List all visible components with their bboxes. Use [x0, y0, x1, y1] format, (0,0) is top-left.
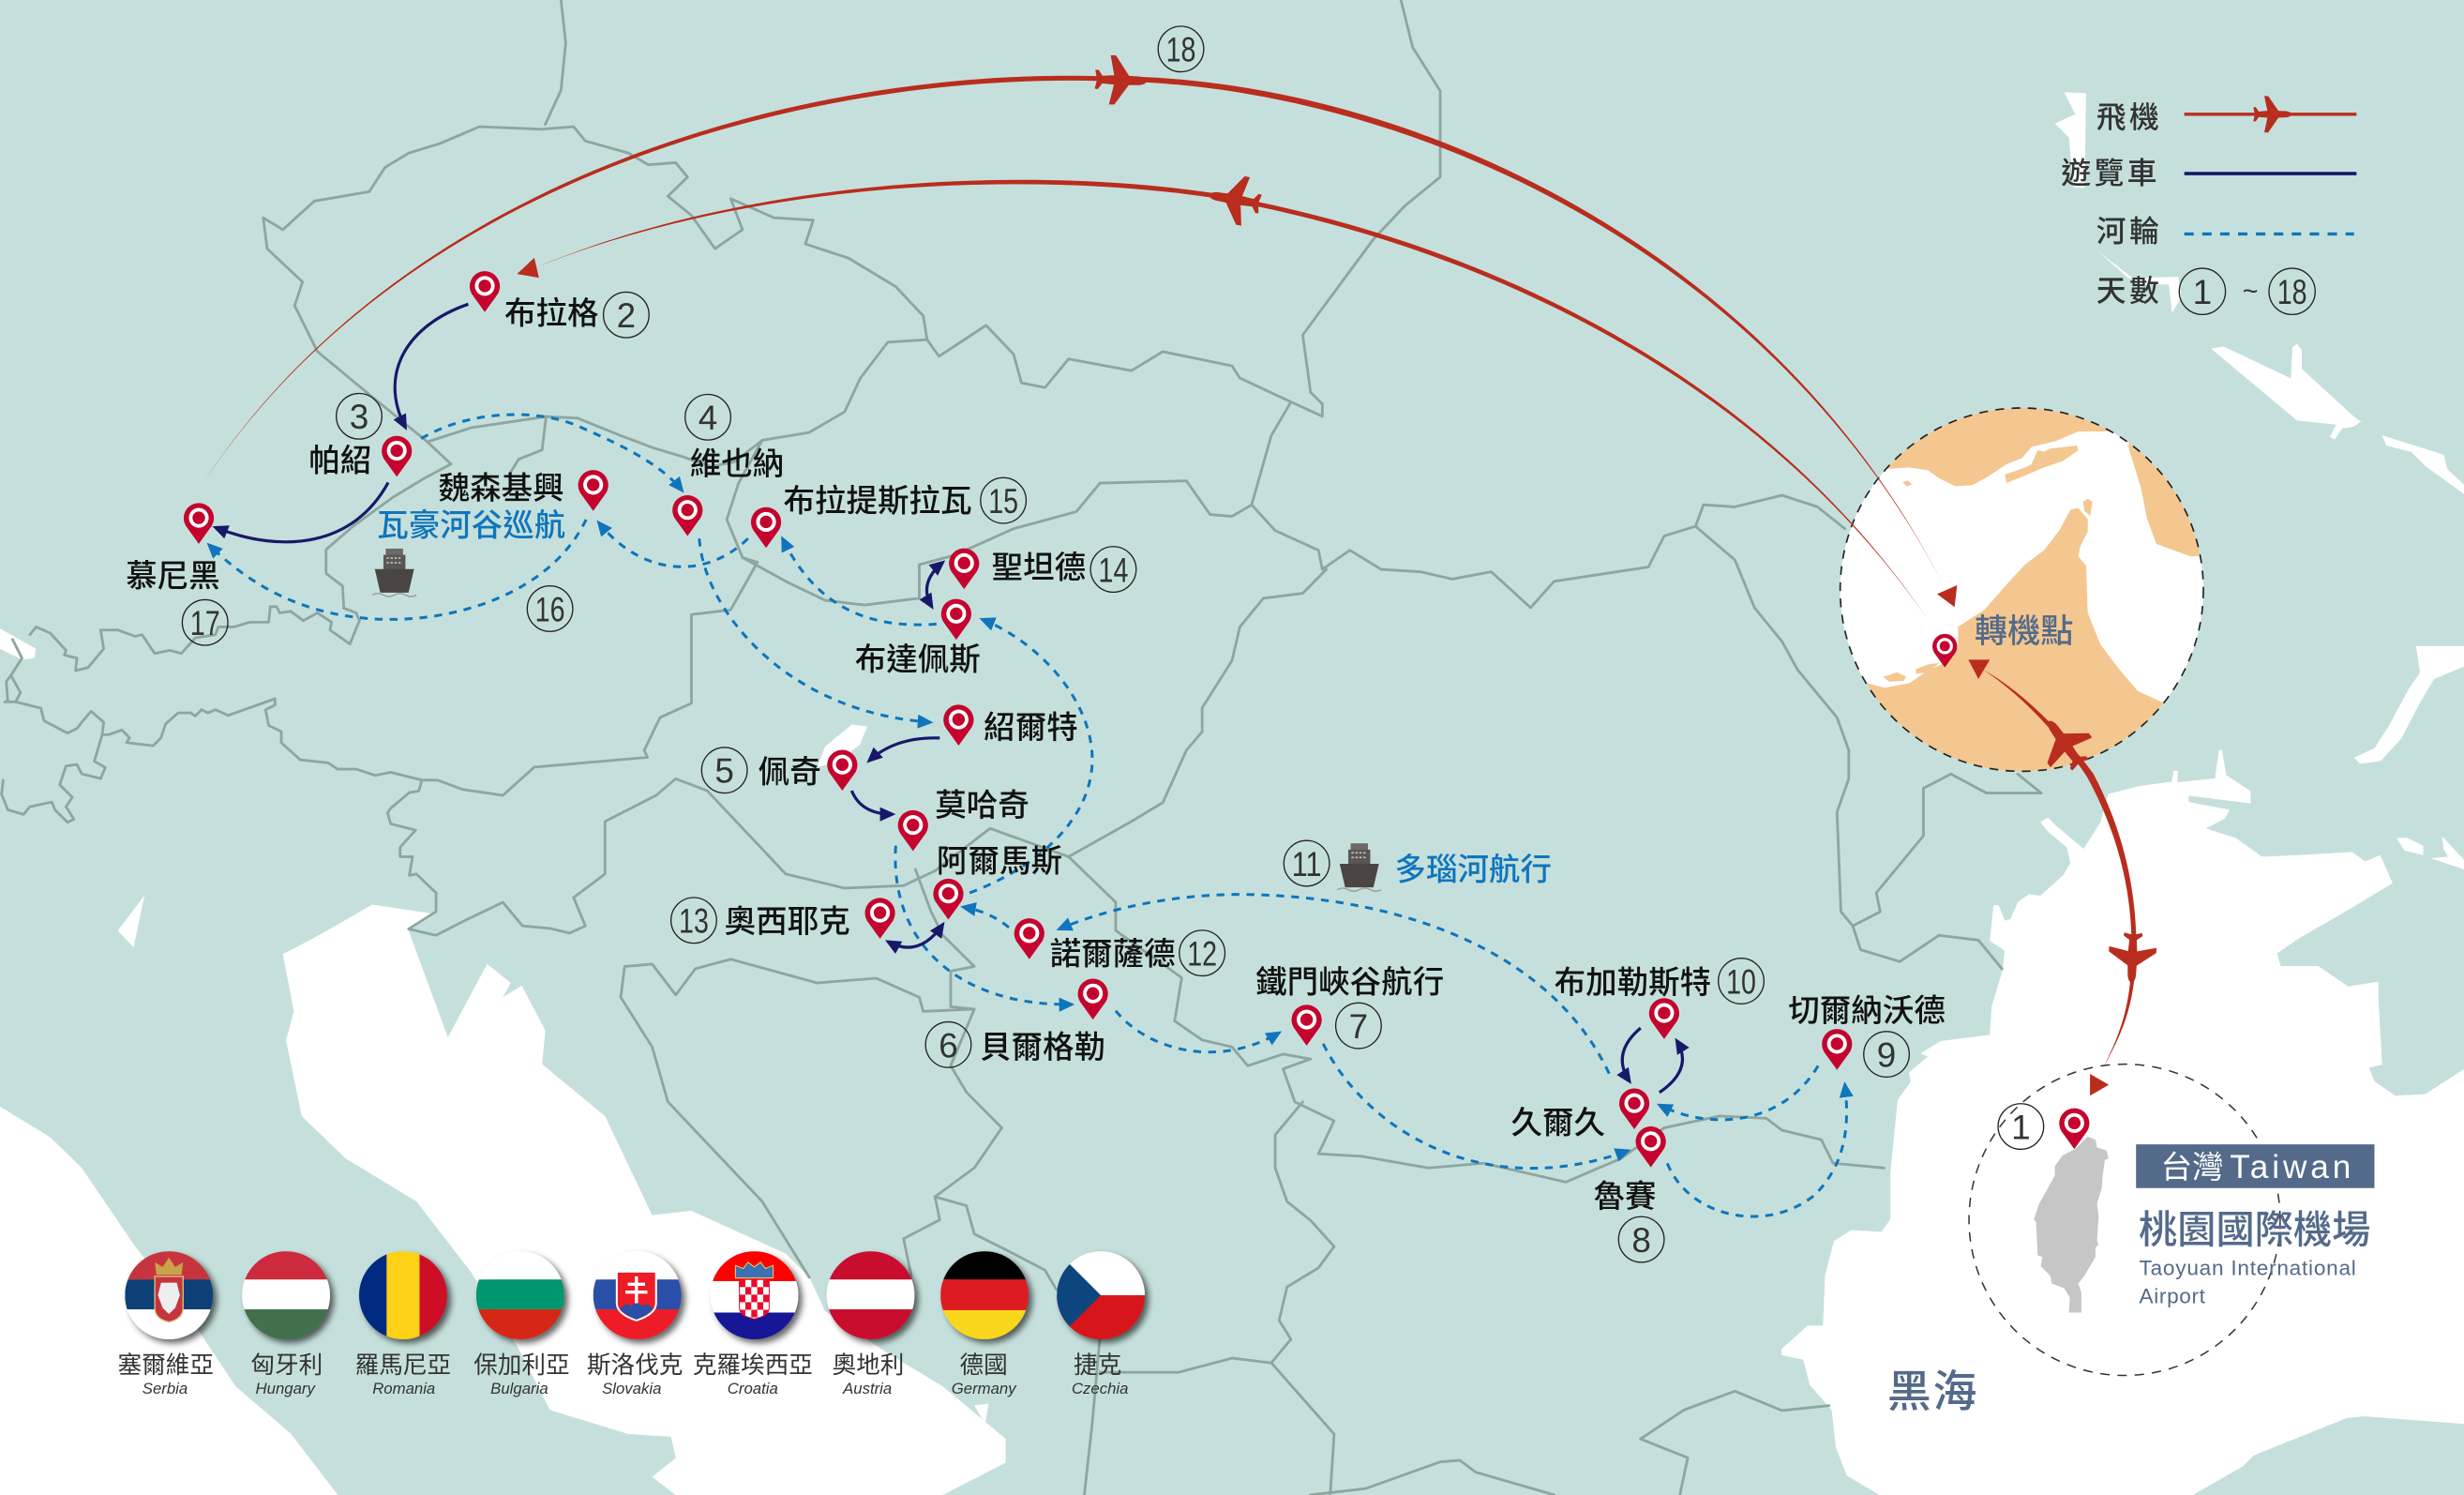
arrow: transit lower [1968, 659, 1990, 679]
day numbers: 5 [714, 752, 734, 791]
day numbers: 11 [1292, 845, 1322, 883]
Black Sea [1781, 749, 2464, 1495]
day numbers: 13 [679, 902, 709, 941]
legend: days [2096, 268, 2315, 314]
day numbers: 2 [617, 296, 636, 335]
map pins [184, 271, 2089, 1168]
flag names: Austria [842, 1380, 892, 1397]
ship icon: Wachau [372, 549, 416, 596]
transit inset circle [1840, 407, 2204, 773]
day numbers: 16 [535, 590, 565, 628]
Taiwan panel [1969, 1065, 2374, 1376]
day numbers: 18 [1166, 31, 1195, 69]
city labels: 維也納 [690, 447, 784, 482]
flight routes [201, 76, 2137, 1069]
flag names: Hungary [256, 1380, 316, 1397]
flag names: Slovakia [602, 1380, 661, 1397]
Taiwan label: 台灣 [2161, 1151, 2224, 1185]
legend: plane [2096, 96, 2356, 134]
city labels: 紹爾特 [984, 711, 1078, 746]
plane: upper arc [1094, 54, 1148, 106]
legend: plane: 飛機 [2096, 100, 2162, 134]
city labels: 帕紹 [308, 444, 371, 478]
flag names: Germany [952, 1380, 1017, 1397]
city labels: 莫哈奇 [935, 789, 1029, 823]
Lake Constance [0, 628, 36, 659]
flag: Romania [359, 1251, 448, 1339]
flag names: 奧地利 [833, 1352, 904, 1379]
day numbers: 14 [1099, 551, 1128, 589]
legend: river cruise: 河輪 [2096, 214, 2162, 248]
city labels: 佩奇 [759, 756, 821, 791]
flag names: 塞爾維亞 [118, 1352, 214, 1379]
day numbers: 12 [1187, 935, 1217, 974]
city labels: 慕尼黑 [126, 560, 220, 595]
legend: days: ~ [2243, 277, 2258, 307]
inset sea disc [1840, 408, 2203, 771]
Taiwan dashed circle [1969, 1065, 2280, 1376]
Caspian fragments [2211, 344, 2361, 439]
flag names: 羅馬尼亞 [355, 1352, 451, 1379]
day numbers: 3 [350, 398, 368, 436]
river cruise routes [209, 415, 1847, 1216]
day numbers: 4 [699, 399, 717, 437]
flag names: 德國 [960, 1352, 1008, 1379]
Lake Balaton [818, 725, 867, 767]
inset dashed outline [1840, 408, 2203, 771]
arrow: Taoyuan [2090, 1074, 2109, 1095]
legend: days: 天數 [2096, 274, 2162, 308]
flag names: 匈牙利 [250, 1352, 323, 1379]
Tyrrhenian Sea [0, 1107, 338, 1495]
day numbers: 1 [2011, 1108, 2031, 1146]
flag names: Romania [372, 1380, 435, 1397]
transit label: 轉機點 [1975, 613, 2073, 650]
Sea of Azov [2354, 646, 2464, 764]
flag names: Serbia [143, 1380, 188, 1397]
plane: southern arc [2108, 932, 2157, 984]
city labels: 鐵門峽谷航行 [1255, 965, 1444, 1000]
city labels [126, 296, 1946, 1215]
flag names: Croatia [728, 1380, 778, 1397]
ship icon: Danube [1337, 843, 1381, 891]
city labels: 布拉格 [504, 296, 599, 331]
flag names [118, 1352, 1128, 1397]
city labels: 布加勒斯特 [1555, 966, 1711, 1001]
legend: coach: 遊覽車 [2061, 157, 2160, 190]
airport english line 2: Airport [2140, 1284, 2206, 1307]
day numbers: 17 [190, 604, 220, 642]
day numbers [182, 26, 2044, 1262]
flight: Taoyuan to transit point [1983, 670, 2137, 1069]
coach routes [216, 304, 1682, 1093]
flag: Serbia [125, 1251, 213, 1339]
city labels: 布達佩斯 [855, 642, 981, 677]
city labels: 魯賽 [1593, 1180, 1657, 1215]
flight: Munich to transit point [201, 76, 1943, 584]
flag: Croatia [711, 1251, 798, 1339]
city labels: 聖坦德 [992, 551, 1086, 585]
inset land [1866, 408, 2200, 771]
Adriatic Sea [283, 905, 1006, 1495]
day numbers: 6 [939, 1026, 958, 1065]
flag: Slovakia [593, 1251, 682, 1339]
flag names: 斯洛伐克 [587, 1352, 683, 1379]
flag row [118, 1251, 1145, 1397]
plane: lower arc [1205, 171, 1265, 228]
Taiwan label box [2136, 1144, 2374, 1188]
flag: Austria [827, 1251, 914, 1339]
Taiwan island [2034, 1137, 2109, 1312]
airport name: 桃園國際機場 [2139, 1209, 2370, 1252]
flag: Germany [940, 1251, 1029, 1339]
arrow: transit upper [1937, 585, 1957, 607]
flag names: Bulgaria [490, 1380, 548, 1397]
city labels: 久爾久 [1510, 1106, 1605, 1140]
flag: Bulgaria [476, 1251, 564, 1339]
flight: transit point to Prague [534, 180, 1927, 618]
city labels: 魏森基興 [439, 472, 564, 506]
Black Sea label: 黑海 [1887, 1367, 1978, 1416]
legend: days: 18 [2277, 273, 2307, 311]
flag names: 捷克 [1074, 1352, 1121, 1379]
city labels: 阿爾馬斯 [937, 845, 1062, 880]
plane and arrow markers [517, 54, 2157, 1095]
legend [2061, 96, 2356, 314]
city labels: 貝爾格勒 [980, 1031, 1105, 1065]
city labels: 諾爾薩德 [1050, 938, 1176, 973]
Taiwan label: Taiwan [2230, 1149, 2351, 1185]
flag names: 克羅埃西亞 [693, 1352, 813, 1379]
plane: inset arc [2028, 706, 2101, 779]
day numbers: 15 [988, 482, 1018, 521]
cruise label: Danube: 多瑙河航行 [1394, 853, 1552, 888]
legend: days: 1 [2193, 273, 2212, 311]
flag: Hungary [242, 1251, 330, 1339]
city labels: 奧西耶克 [725, 905, 850, 940]
flag: Czechia [1057, 1251, 1145, 1339]
city labels: 切爾納沃德 [1788, 994, 1946, 1029]
Lake Garda [118, 895, 144, 947]
city labels: 布拉提斯拉瓦 [783, 485, 972, 520]
cruise label: Wachau: 瓦豪河谷巡航 [377, 509, 565, 544]
day numbers: 7 [1349, 1007, 1368, 1046]
airport english line 1: Taoyuan International [2140, 1256, 2356, 1279]
flag names: Czechia [1072, 1380, 1128, 1397]
day numbers: 10 [1726, 962, 1756, 1001]
day numbers: 8 [1631, 1221, 1651, 1260]
flag names: 保加利亞 [473, 1352, 570, 1379]
arrow: Prague [517, 258, 539, 278]
day numbers: 9 [1877, 1036, 1896, 1075]
